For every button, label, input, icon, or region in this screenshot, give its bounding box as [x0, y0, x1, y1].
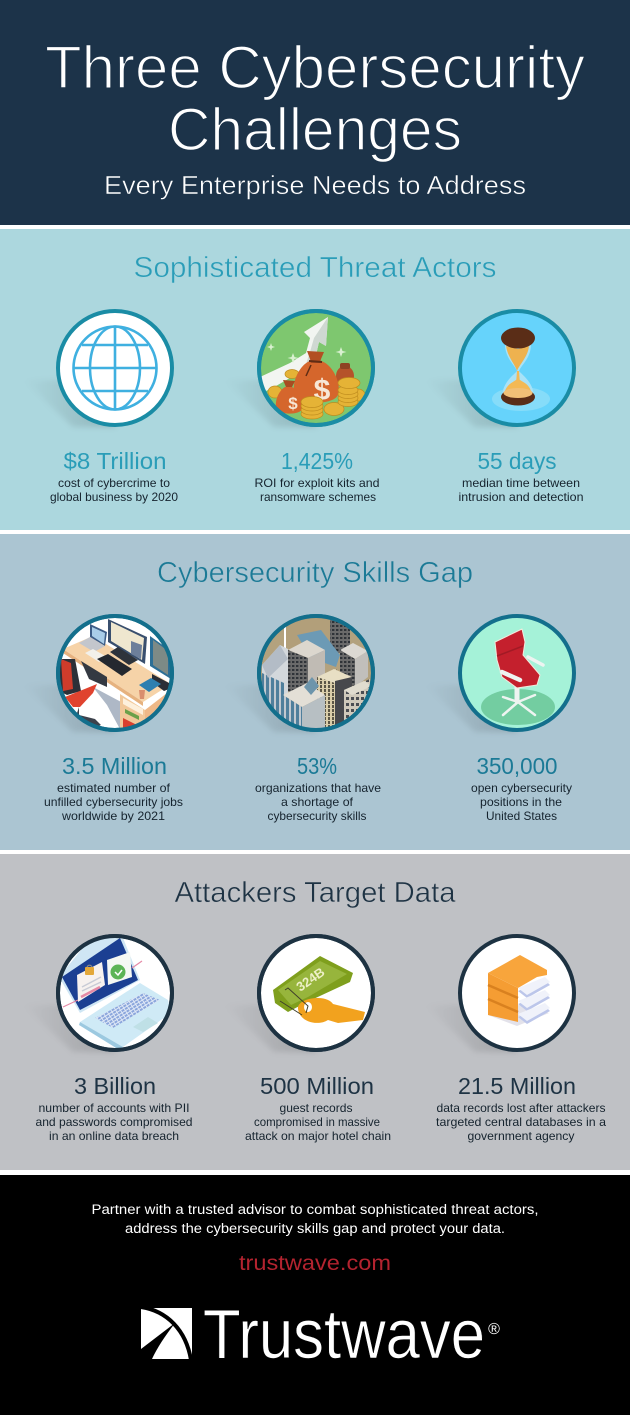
stat: 350,000 [471, 753, 572, 823]
panel: footer [0, 1175, 630, 1415]
stat: 3 billion: in an online data breach [49, 1129, 179, 1143]
icon: money bags: $ [314, 374, 331, 407]
icon: office chair [460, 616, 574, 730]
icon: money bags [259, 311, 373, 425]
stat: 53%: cybersecurity skills [268, 809, 366, 823]
stat: 3.5 million: worldwide by 2021 [61, 809, 165, 823]
icon: tag and key [259, 936, 373, 1050]
icon: globe [58, 311, 172, 425]
stat: 55 days: 55 days [478, 448, 556, 474]
stat: 1,425% [254, 448, 380, 504]
stat: 21.5 million: targeted central databases in a [436, 1115, 606, 1129]
stat: 3 billion [36, 1073, 192, 1143]
call to action text [92, 1202, 538, 1236]
stat: 21.5 million: government agency [468, 1129, 574, 1143]
icon: hourglass [460, 311, 574, 425]
stat: 3.5 million: 3.5 Million [62, 753, 167, 779]
stat: 350,000: open cybersecurity [471, 781, 572, 795]
call to action text: address the cybersecurity skills gap and protect your data. [125, 1221, 505, 1236]
stat: 21.5 million: 21.5 Million [458, 1073, 576, 1099]
logo: Trustwave: ® [488, 1321, 500, 1338]
icon: city [259, 613, 373, 733]
stat: 500 million: 500 Million [260, 1073, 374, 1099]
stat: 53% [255, 753, 381, 823]
stat: 3.5 million [44, 753, 183, 823]
stat: 350,000: 350,000 [476, 753, 558, 779]
call to action text: Partner with a trusted advisor to combat sophisticated threat actors, [92, 1202, 538, 1217]
stat: 3.5 million: unfilled cybersecurity jobs [44, 795, 183, 809]
stat: 53%: 53% [297, 753, 337, 779]
stat: 350,000: positions in the [480, 795, 562, 809]
subtitle: Every Enterprise Needs to Address [104, 170, 526, 200]
icon: desk [58, 616, 172, 733]
heading: Cybersecurity Skills Gap [157, 557, 473, 589]
link: trustwave.com [239, 1252, 391, 1275]
stat: 500 million: attack on major hotel chain [245, 1129, 391, 1143]
stat: 53%: organizations that have [255, 781, 381, 795]
panel: sophisticated threat actors [0, 229, 630, 530]
icon: money bags: $ [288, 394, 298, 413]
stat: 3 billion: 3 Billion [74, 1073, 156, 1099]
stat: 21.5 million: data records lost after attackers [436, 1101, 606, 1115]
icon: data stack [460, 936, 574, 1050]
icon: laptop [58, 933, 172, 1051]
stat: 1,425%: ransomware schemes [260, 490, 376, 504]
stat: 55 days: intrusion and detection [458, 490, 584, 504]
panel: cybersecurity skills gap [0, 534, 630, 850]
stat: 350,000: United States [486, 809, 557, 823]
stat: 3 billion: and passwords compromised [36, 1115, 192, 1129]
stat: 8 trillion [50, 448, 178, 504]
stat: 8 trillion: cost of cybercrime to [58, 476, 170, 490]
heading: Attackers Target Data [174, 877, 456, 909]
stat: 3 billion: number of accounts with PII [38, 1101, 190, 1115]
stat: 1,425%: 1,425% [281, 448, 353, 474]
stat: 8 trillion: $8 Trillion [64, 448, 166, 474]
title: Three Cybersecurity [45, 34, 585, 101]
stat: 500 million: guest records [280, 1101, 352, 1115]
heading: Sophisticated Threat Actors [134, 252, 496, 284]
logo: Trustwave: Trustwave [203, 1295, 485, 1373]
stat: 55 days [458, 448, 584, 504]
panel: header [0, 0, 630, 225]
stat: 55 days: median time between [462, 476, 580, 490]
stat: 3.5 million: estimated number of [57, 781, 171, 795]
stat: 21.5 million [436, 1073, 606, 1143]
stat: 1,425%: ROI for exploit kits and [254, 476, 380, 490]
title: Challenges [168, 96, 462, 163]
stat: 53%: a shortage of [281, 795, 354, 809]
stat: 500 million: compromised in massive [254, 1115, 380, 1129]
icon: tag and key: 324B [293, 964, 327, 994]
stat: 8 trillion: global business by 2020 [50, 490, 178, 504]
panel: attackers target data [0, 854, 630, 1170]
stat: 500 million [245, 1073, 391, 1143]
title [45, 34, 585, 163]
